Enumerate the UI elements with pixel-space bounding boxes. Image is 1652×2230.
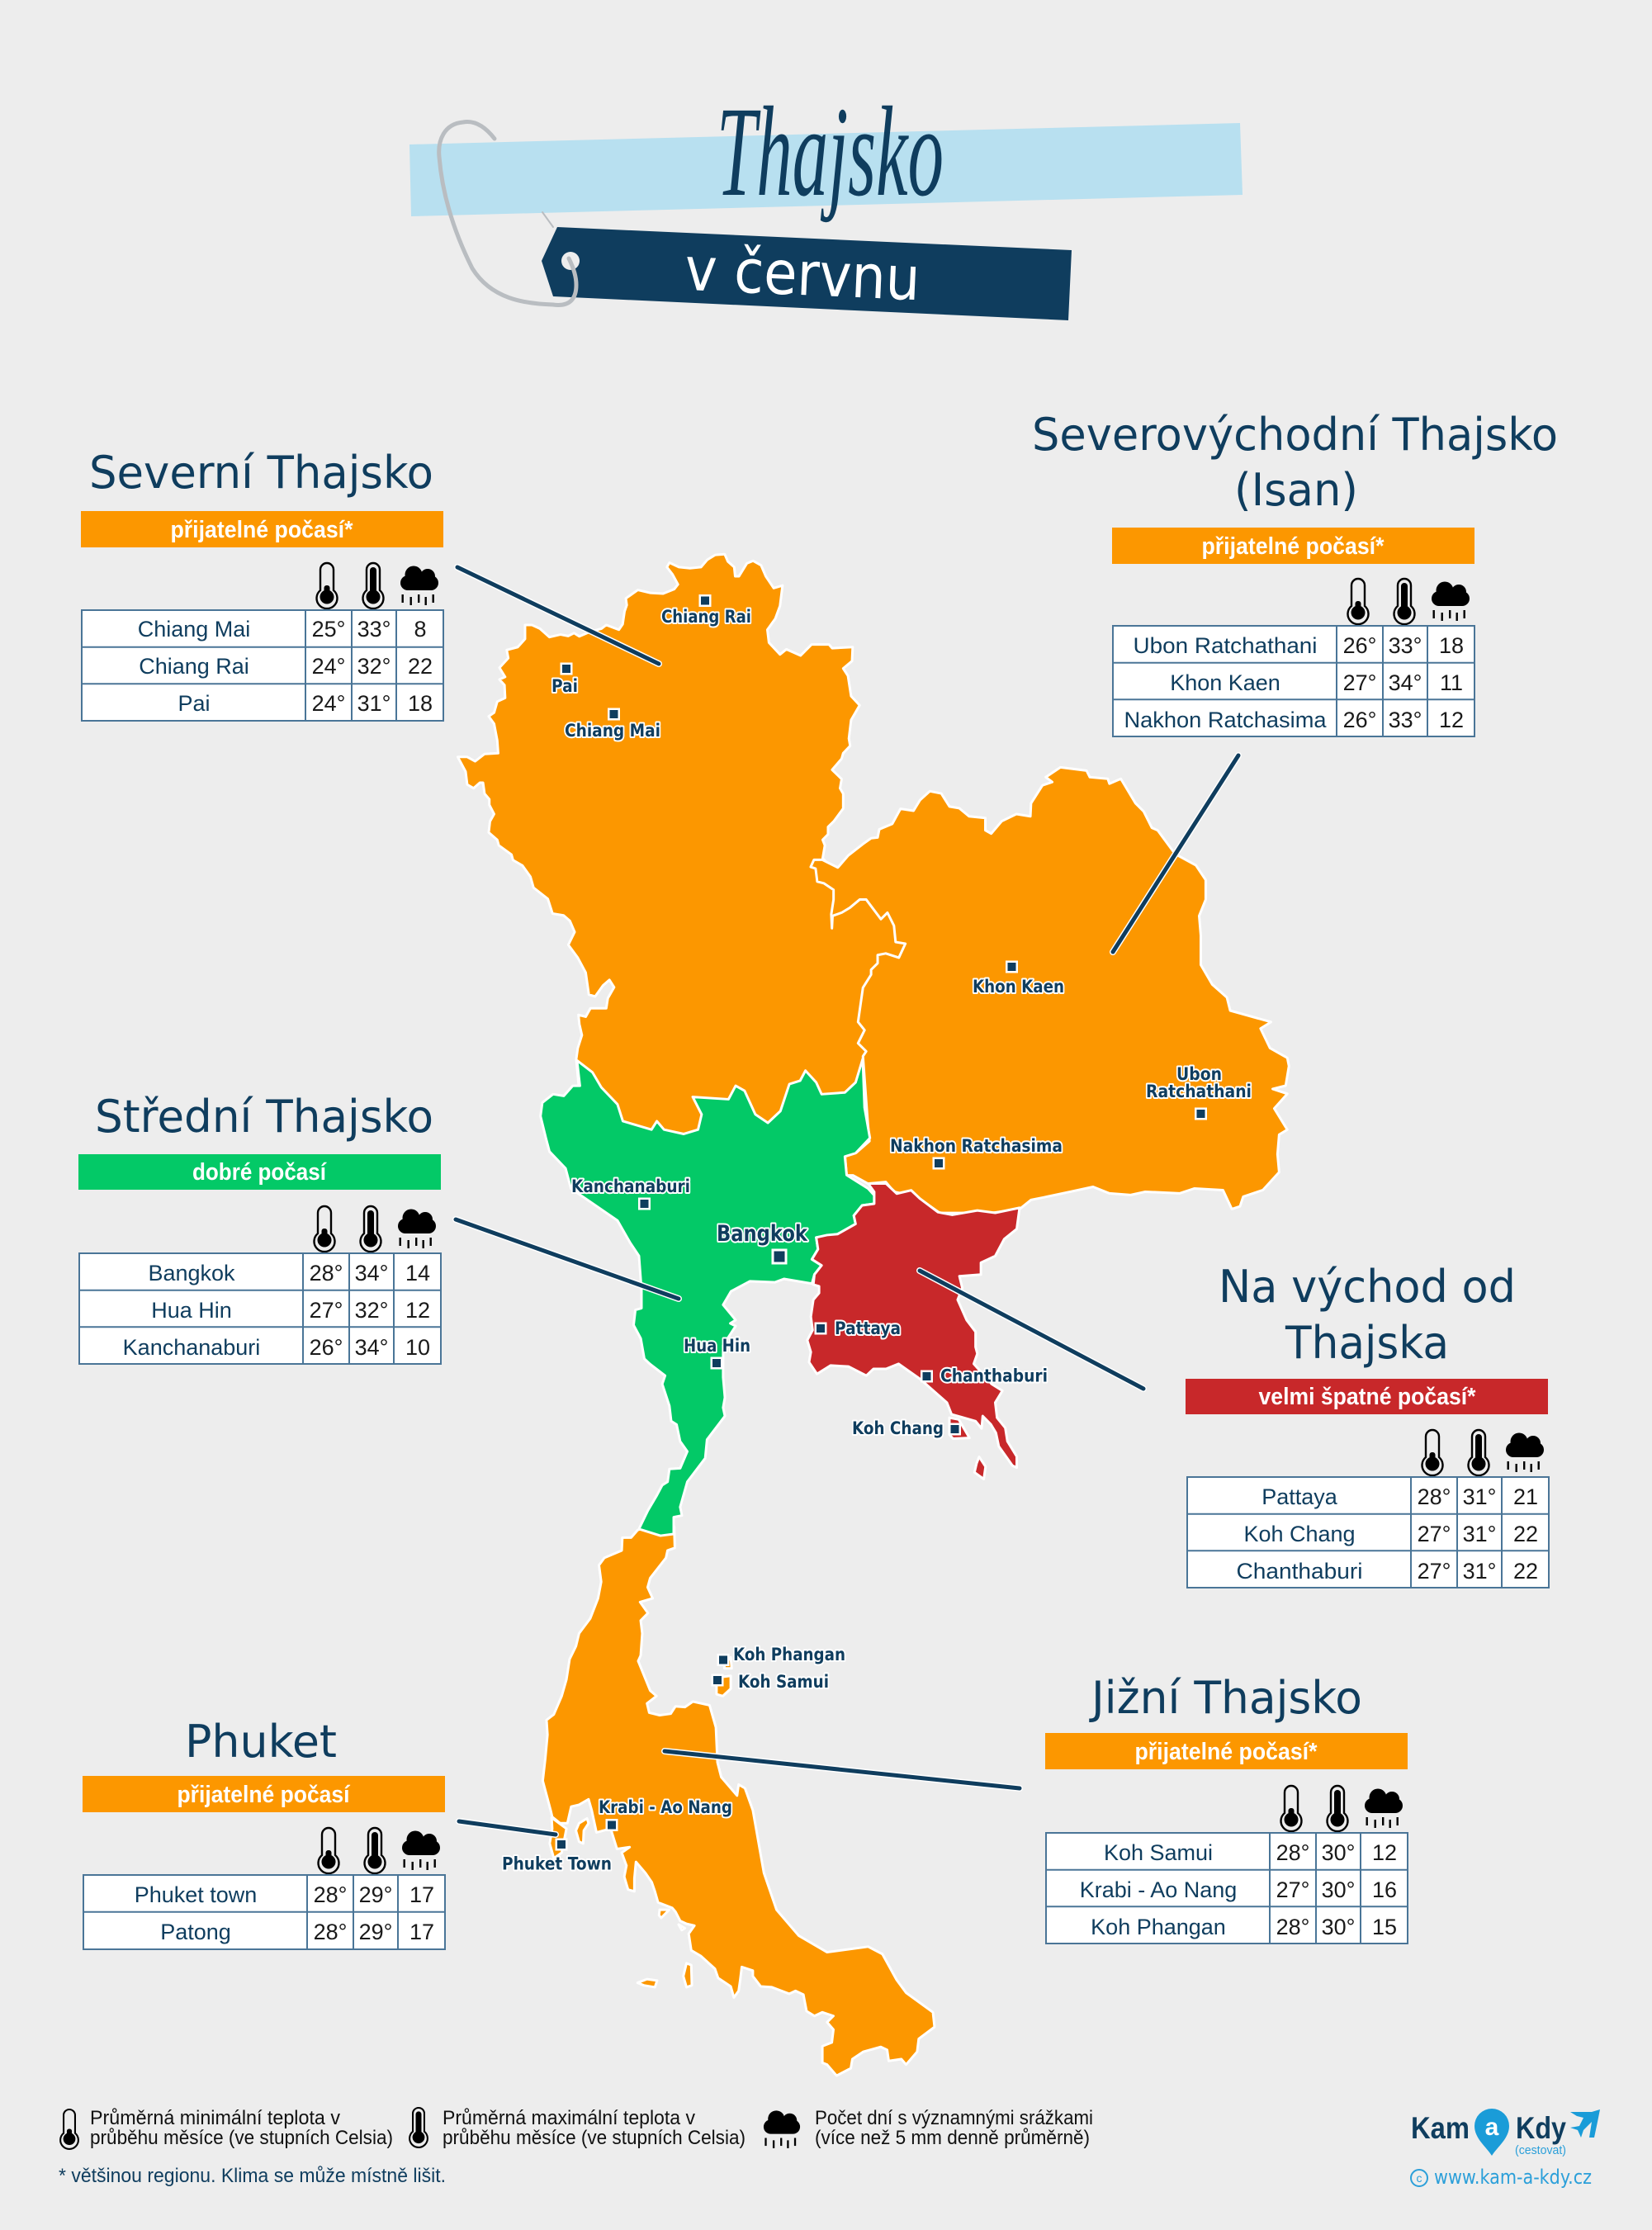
climate table: 17 bbox=[409, 1920, 434, 1944]
island group: south-west islands bbox=[576, 1818, 692, 1987]
city: Khon Kaen bbox=[973, 961, 1064, 997]
city: Kanchanaburi: Kanchanaburi bbox=[571, 1177, 690, 1196]
climate table: 28° bbox=[310, 1261, 343, 1285]
panel: east bbox=[1186, 1261, 1549, 1588]
weather bar: přijatelné počasí* bbox=[1134, 1739, 1318, 1765]
city: Nakhon Ratchasima: Nakhon Ratchasima bbox=[890, 1136, 1063, 1156]
weather bar: přijatelné počasí bbox=[177, 1782, 350, 1808]
leader: Phuket bbox=[459, 1821, 556, 1835]
weather bar bbox=[78, 1154, 441, 1190]
climate table: 12 bbox=[1372, 1840, 1397, 1865]
logo: Kam a Kdy bbox=[1411, 2109, 1600, 2189]
climate table: 28° bbox=[314, 1882, 347, 1907]
panel body: north bbox=[81, 511, 443, 721]
island: Koh Phangan bbox=[724, 1657, 731, 1669]
column icons bbox=[1347, 579, 1470, 624]
heading: east: Na východ od bbox=[1219, 1261, 1516, 1313]
icon: location pin: a bbox=[1485, 2114, 1499, 2141]
panel: south bbox=[1045, 1672, 1408, 1944]
climate table: 11 bbox=[1440, 670, 1463, 695]
city: Ubon Ratchathani: Ratchathani bbox=[1146, 1082, 1252, 1101]
climate table: Koh Samui bbox=[1104, 1840, 1213, 1865]
climate table: 27° bbox=[1276, 1877, 1309, 1902]
heading: northeast: Severovýchodní Thajsko bbox=[1032, 409, 1558, 461]
tag hole bbox=[561, 252, 580, 270]
climate table: 27° bbox=[310, 1298, 343, 1323]
climate table: 31° bbox=[1463, 1522, 1496, 1546]
climate table: Patong bbox=[160, 1920, 231, 1944]
city: Ubon Ratchathani bbox=[1146, 1064, 1252, 1120]
panel: north bbox=[81, 447, 443, 721]
climate table: 14 bbox=[405, 1261, 430, 1285]
climate table bbox=[82, 610, 443, 721]
dark luggage tag bbox=[542, 227, 1072, 320]
logo subtitle: (cestovat) bbox=[1515, 2143, 1566, 2157]
city: Hua Hin bbox=[684, 1336, 750, 1369]
legend: minimum temperature bbox=[60, 2107, 393, 2149]
climate table: Pai bbox=[178, 691, 211, 716]
map of Thailand bbox=[457, 554, 1289, 2076]
island: Koh Kut bbox=[974, 1457, 986, 1479]
weather bar bbox=[1112, 528, 1474, 564]
climate table: 27° bbox=[1343, 670, 1376, 695]
leader: east bbox=[920, 1271, 1143, 1389]
climate table: 28° bbox=[1276, 1840, 1309, 1865]
legend: maximum temperature: průběhu měsíce (ve stupních Celsia) bbox=[443, 2127, 746, 2149]
climate table: 29° bbox=[359, 1882, 392, 1907]
legend: rainy days: Počet dní s významnými srážkami bbox=[815, 2107, 1093, 2129]
city: Chiang Mai bbox=[565, 708, 660, 741]
leader: northeast bbox=[1113, 755, 1238, 952]
heading: east: Thajska bbox=[1285, 1317, 1449, 1369]
panel body: central bbox=[78, 1154, 441, 1364]
climate table: Bangkok bbox=[148, 1261, 235, 1285]
region: central bbox=[541, 1058, 874, 1536]
light blue ribbon bbox=[409, 123, 1243, 216]
climate table: 15 bbox=[1372, 1915, 1397, 1939]
climate table: 22 bbox=[1513, 1559, 1538, 1584]
footnote: * většinou regionu. Klima se může místně lišit. bbox=[59, 2165, 446, 2187]
panel body: east bbox=[1186, 1379, 1549, 1588]
panel: northeast bbox=[1032, 409, 1558, 736]
city: Phuket Town bbox=[502, 1838, 612, 1874]
climate table: Ubon Ratchathani bbox=[1133, 633, 1318, 658]
city: Phuket Town: Phuket Town bbox=[502, 1854, 612, 1874]
column icons bbox=[1281, 1786, 1403, 1831]
climate table: 17 bbox=[409, 1882, 434, 1907]
climate table: 18 bbox=[1439, 633, 1464, 658]
climate table: 16 bbox=[1372, 1877, 1397, 1902]
climate table: 22 bbox=[408, 654, 433, 679]
heading: central: Střední Thajsko bbox=[95, 1091, 433, 1143]
panel: Phuket bbox=[83, 1716, 445, 1949]
climate table: 31° bbox=[1463, 1484, 1496, 1509]
city: Pai bbox=[551, 662, 578, 696]
column icons bbox=[317, 563, 438, 608]
climate table: Kanchanaburi bbox=[123, 1335, 260, 1360]
climate table: Khon Kaen bbox=[1170, 670, 1280, 695]
climate table: 31° bbox=[357, 691, 391, 716]
climate table: 33° bbox=[1389, 708, 1422, 732]
climate table: Koh Chang bbox=[1243, 1522, 1356, 1546]
climate table: 22 bbox=[1513, 1522, 1538, 1546]
city: Koh Samui bbox=[712, 1672, 829, 1692]
leader lines bbox=[456, 567, 1238, 1835]
city: Pattaya bbox=[814, 1319, 901, 1338]
climate table: Phuket town bbox=[135, 1882, 257, 1907]
climate table bbox=[83, 1875, 445, 1949]
city: Khon Kaen: Khon Kaen bbox=[973, 977, 1064, 997]
title: Thajsko: Thajsko bbox=[717, 80, 944, 223]
weather bar: přijatelné počasí* bbox=[170, 517, 353, 543]
region: east bbox=[807, 1183, 1020, 1479]
city: Ubon Ratchathani: Ubon bbox=[1176, 1064, 1222, 1084]
climate table: Pattaya bbox=[1261, 1484, 1338, 1509]
city: Bangkok bbox=[717, 1221, 808, 1265]
city: Krabi - Ao Nang: Krabi - Ao Nang bbox=[599, 1797, 732, 1817]
city: Pai: Pai bbox=[551, 676, 578, 696]
heading: northeast: (Isan) bbox=[1234, 464, 1358, 516]
city: Bangkok: Bangkok bbox=[717, 1221, 808, 1247]
weather bar bbox=[83, 1776, 445, 1812]
climate table: 30° bbox=[1322, 1877, 1355, 1902]
climate table bbox=[79, 1253, 441, 1364]
legend: rainy days: (více než 5 mm denně průměrně) bbox=[815, 2127, 1090, 2149]
legend bbox=[59, 2107, 1093, 2187]
legend: maximum temperature bbox=[409, 2107, 746, 2149]
climate table bbox=[1187, 1477, 1549, 1588]
logo word: Kam: Kam bbox=[1411, 2111, 1470, 2145]
climate table: Chanthaburi bbox=[1237, 1559, 1362, 1584]
leader: south bbox=[665, 1751, 1020, 1788]
climate table: Nakhon Ratchasima bbox=[1124, 708, 1327, 732]
column icons bbox=[319, 1828, 440, 1873]
title tag bbox=[409, 80, 1243, 320]
region: northeast (Isan) bbox=[811, 767, 1289, 1213]
website: www.kam-a-kdy.cz bbox=[1434, 2166, 1592, 2189]
climate table: 27° bbox=[1418, 1559, 1451, 1584]
island: Koh Chang bbox=[949, 1418, 969, 1438]
panel body: Phuket bbox=[83, 1776, 445, 1949]
climate table: 28° bbox=[314, 1920, 347, 1944]
city: Koh Phangan: Koh Phangan bbox=[733, 1645, 845, 1664]
climate table: 34° bbox=[355, 1261, 388, 1285]
climate table: 10 bbox=[405, 1335, 430, 1360]
climate table: Hua Hin bbox=[151, 1298, 232, 1323]
city: Nakhon Ratchasima bbox=[890, 1136, 1063, 1169]
weather bar bbox=[1186, 1379, 1548, 1414]
city: Koh Chang: Koh Chang bbox=[852, 1418, 944, 1438]
legend: maximum temperature: Průměrná maximální teplota v bbox=[443, 2107, 695, 2129]
climate table bbox=[1113, 626, 1474, 736]
heading: east bbox=[1219, 1261, 1516, 1369]
column icons bbox=[1422, 1430, 1544, 1475]
subtitle: v červnu: v červnu bbox=[684, 234, 921, 315]
tag string bbox=[439, 122, 576, 305]
city: Pattaya: Pattaya bbox=[835, 1319, 901, 1338]
climate table: 8 bbox=[414, 617, 427, 642]
climate table: 30° bbox=[1322, 1840, 1355, 1865]
weather bar bbox=[1045, 1733, 1408, 1769]
leader: north bbox=[457, 567, 659, 664]
weather bar: dobré počasí bbox=[192, 1159, 327, 1186]
climate table: 12 bbox=[405, 1298, 430, 1323]
city: Hua Hin: Hua Hin bbox=[684, 1336, 750, 1356]
climate table: 34° bbox=[355, 1335, 388, 1360]
climate table: 26° bbox=[1343, 633, 1376, 658]
heading: north: Severní Thajsko bbox=[89, 447, 433, 499]
website: c bbox=[1417, 2171, 1422, 2185]
climate table: 34° bbox=[1389, 670, 1422, 695]
climate table: 21 bbox=[1513, 1484, 1538, 1509]
climate table: 25° bbox=[312, 617, 345, 642]
region: south bbox=[542, 1527, 935, 2076]
climate table bbox=[1046, 1833, 1408, 1944]
heading: Phuket: Phuket bbox=[185, 1716, 337, 1768]
city: Koh Samui: Koh Samui bbox=[738, 1672, 829, 1692]
city: Chiang Mai: Chiang Mai bbox=[565, 721, 660, 741]
climate table: 33° bbox=[1389, 633, 1422, 658]
climate table: 28° bbox=[1418, 1484, 1451, 1509]
city: Chiang Rai bbox=[661, 594, 751, 627]
heading: south: Jižní Thajsko bbox=[1089, 1672, 1362, 1724]
city: Chanthaburi: Chanthaburi bbox=[940, 1366, 1048, 1385]
climate table: 24° bbox=[312, 654, 345, 679]
climate table: 30° bbox=[1322, 1915, 1355, 1939]
climate table: 24° bbox=[312, 691, 345, 716]
region: north bbox=[457, 554, 935, 1137]
legend: minimum temperature: Průměrná minimální teplota v bbox=[90, 2107, 340, 2129]
heading: northeast bbox=[1032, 409, 1558, 516]
panel body: south bbox=[1045, 1733, 1408, 1944]
island: Koh Samui bbox=[717, 1676, 731, 1696]
leader: central bbox=[456, 1219, 679, 1299]
climate table: 26° bbox=[310, 1335, 343, 1360]
climate table: Chiang Rai bbox=[139, 654, 249, 679]
climate table: 32° bbox=[355, 1298, 388, 1323]
panel body: northeast bbox=[1112, 528, 1474, 736]
climate table: 18 bbox=[408, 691, 433, 716]
column icons bbox=[314, 1206, 436, 1252]
city: Chiang Rai: Chiang Rai bbox=[661, 607, 751, 627]
icon: plane bbox=[1570, 2109, 1600, 2138]
weather bar: velmi špatné počasí* bbox=[1258, 1384, 1476, 1410]
climate table: 28° bbox=[1276, 1915, 1309, 1939]
climate table: 12 bbox=[1439, 708, 1464, 732]
legend: rainy days bbox=[764, 2107, 1093, 2149]
climate table: Krabi - Ao Nang bbox=[1080, 1877, 1237, 1902]
climate table: 29° bbox=[359, 1920, 392, 1944]
icon: location pin bbox=[1474, 2109, 1509, 2156]
weather bar bbox=[81, 511, 443, 547]
weather bar: přijatelné počasí* bbox=[1202, 533, 1385, 560]
climate table: 27° bbox=[1418, 1522, 1451, 1546]
climate table: 26° bbox=[1343, 708, 1376, 732]
city: Kanchanaburi bbox=[571, 1177, 690, 1210]
climate table: Koh Phangan bbox=[1091, 1915, 1226, 1939]
climate table: 32° bbox=[357, 654, 391, 679]
panel: central bbox=[78, 1091, 441, 1364]
legend: minimum temperature: průběhu měsíce (ve stupních Celsia) bbox=[90, 2127, 393, 2149]
climate table: Chiang Mai bbox=[138, 617, 250, 642]
logo word: Kdy: Kdy bbox=[1516, 2111, 1566, 2145]
city: Krabi - Ao Nang bbox=[599, 1797, 732, 1831]
climate table: 33° bbox=[357, 617, 391, 642]
island: Phuket bbox=[550, 1818, 566, 1858]
climate table: 31° bbox=[1463, 1559, 1496, 1584]
city markers and labels bbox=[502, 594, 1252, 1874]
